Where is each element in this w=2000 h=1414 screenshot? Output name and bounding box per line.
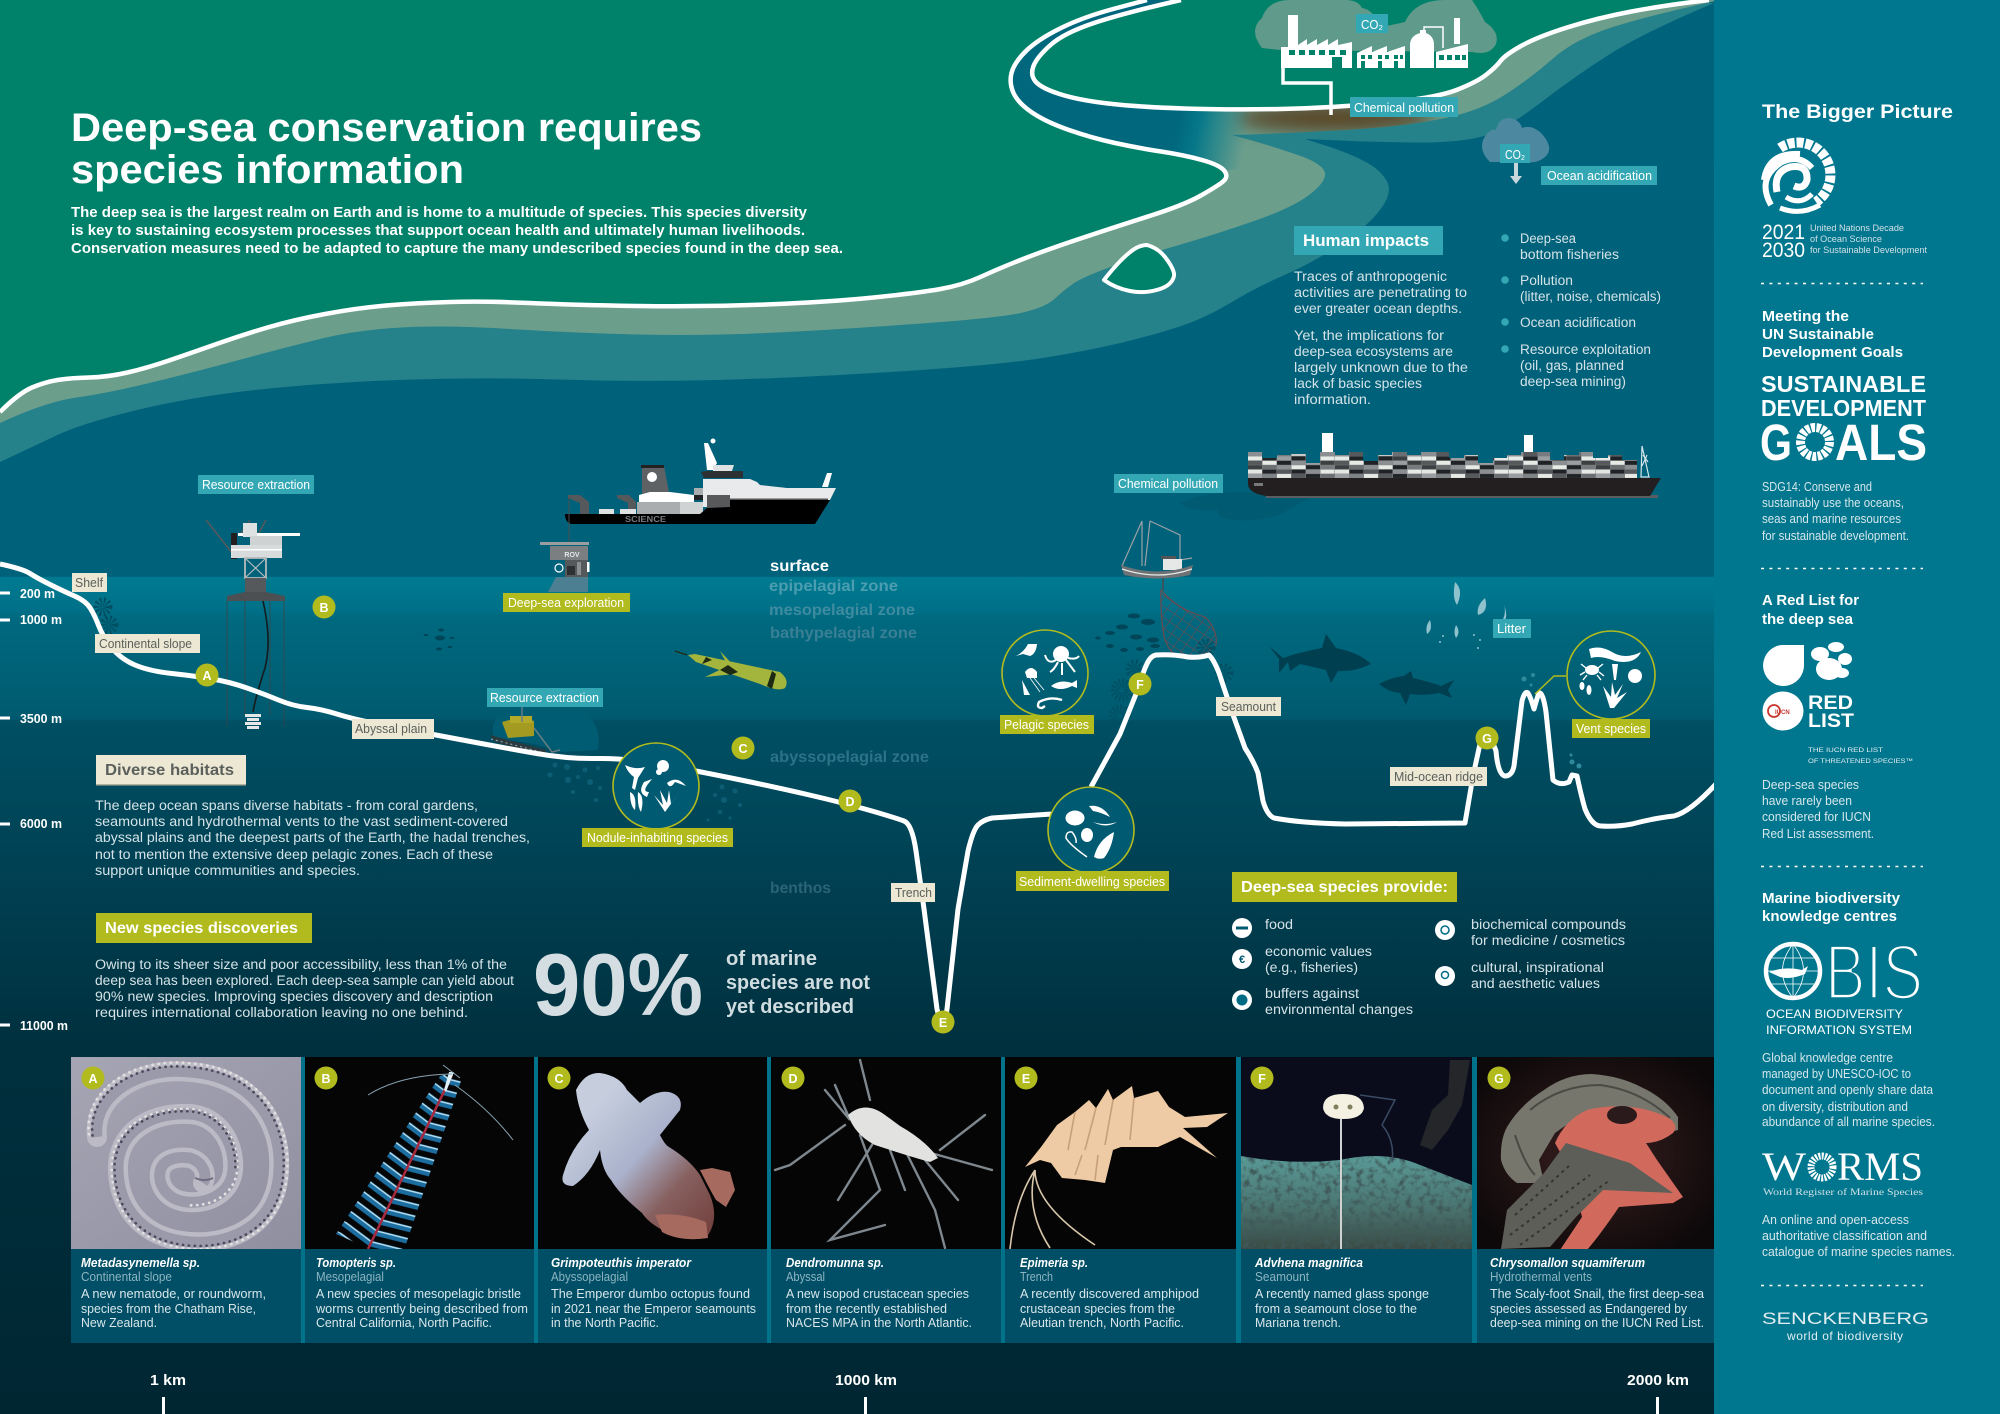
sidebar: Red List section: Red List assessment.	[1762, 827, 1874, 841]
sidebar: SDG section: ALS	[1835, 414, 1927, 471]
species card F: Mariana trench.	[1255, 1316, 1341, 1330]
beige terrain labels: Seamount	[1221, 700, 1277, 714]
sidebar: Red List section: considered for IUCN	[1762, 810, 1871, 824]
panel: human impacts: deep-sea ecosystems are	[1294, 344, 1453, 359]
statistic: 90%: 90%	[533, 935, 703, 1034]
sidebar: knowledge centres section: abundance of all marine species.	[1762, 1115, 1935, 1129]
depth surface zones: benthos	[770, 880, 831, 897]
panel: deep-sea species provide: Deep-sea species provide:	[1241, 879, 1448, 896]
species card A: A	[88, 1072, 98, 1086]
location markers A to G: B	[319, 601, 329, 615]
species card G	[1477, 1057, 1714, 1343]
sidebar: Red List section: the deep sea	[1762, 612, 1854, 628]
logo: Senckenberg: SENCKENBERG	[1762, 1309, 1929, 1328]
sidebar: knowledge centres section: on diversity, distribution and	[1762, 1100, 1908, 1114]
panel: human impacts: (litter, noise, chemicals)	[1520, 289, 1661, 304]
panel: human impacts: information.	[1294, 392, 1371, 407]
panel: human impacts	[1294, 226, 1661, 407]
beige terrain labels	[72, 573, 1487, 902]
sidebar: knowledge centres section: Marine biodiversity	[1762, 891, 1900, 907]
distance scale: 1000 km	[835, 1373, 897, 1389]
intro text: is key to sustaining ecosystem processes that support ocean health and ultimately human livelihoods.	[71, 222, 805, 239]
panel: deep-sea species provide: buffers against	[1265, 986, 1359, 1001]
species card A: Continental slope	[81, 1270, 172, 1284]
sidebar: knowledge centres section: An online and open-access	[1762, 1213, 1909, 1227]
depth scale: 200 m	[20, 586, 55, 601]
location markers A to G: C	[738, 742, 748, 756]
species card C: in the North Pacific.	[551, 1316, 659, 1330]
label: deep-sea exploration: Deep-sea exploration	[508, 596, 624, 610]
panel: human impacts: Deep-sea	[1520, 231, 1576, 246]
species card C: C	[554, 1072, 564, 1086]
species card E: Trench	[1020, 1270, 1053, 1284]
species card D	[771, 1057, 1001, 1343]
sidebar: knowledge centres section: W	[1762, 1144, 1806, 1189]
species card D: Dendromunna sp.	[786, 1256, 884, 1270]
species card D: from the recently established	[786, 1302, 947, 1316]
teal impact labels: Resource extraction	[490, 691, 599, 705]
sidebar: SDG section: Development Goals	[1762, 345, 1903, 361]
vent callout connector	[1535, 676, 1566, 694]
species card D: Abyssal	[786, 1270, 825, 1284]
beige terrain labels: Continental slope	[99, 637, 192, 651]
logo: UN Ocean Decade	[1762, 143, 1927, 262]
panel: new species discoveries: Owing to its sheer size and poor accessibility, less than 1% of the	[95, 957, 507, 972]
sidebar: knowledge centres section: RMS	[1837, 1144, 1923, 1189]
location markers A to G	[196, 596, 1498, 1034]
label: ocean acidification: Ocean acidification	[1547, 169, 1652, 183]
sidebar: knowledge centres section: managed by UNESCO-IOC to	[1762, 1067, 1911, 1081]
beige terrain labels: Abyssal plain	[355, 722, 427, 736]
panel: deep-sea species provide: (e.g., fisheries)	[1265, 960, 1358, 975]
species card G: deep-sea mining on the IUCN Red List.	[1490, 1316, 1704, 1330]
intro text: Conservation measures need to be adapted to capture the many undescribed species found in the deep sea.	[71, 240, 843, 257]
label: pelagic species: Pelagic species	[1004, 718, 1089, 732]
sidebar: knowledge centres section: document and openly share data	[1762, 1083, 1933, 1097]
species card E	[1005, 1057, 1236, 1343]
species circle: vent	[1567, 631, 1655, 719]
panel: human impacts: bottom fisheries	[1520, 247, 1619, 262]
depth scale	[0, 586, 68, 1033]
icon: ROV: ROV	[564, 552, 580, 559]
icon: oil rig	[206, 520, 300, 729]
location markers A to G: E	[939, 1016, 947, 1030]
corals on slopes	[98, 602, 1229, 723]
land: green coast with white coastline	[0, 0, 1709, 412]
title: species information	[71, 148, 464, 192]
sidebar: SDG section: SUSTAINABLE	[1761, 371, 1926, 397]
beige terrain labels: Trench	[895, 886, 932, 900]
location markers A to G: A	[202, 669, 212, 683]
location markers A to G: D	[845, 795, 855, 809]
panel: diverse habitats: The deep ocean spans diverse habitats - from coral gardens,	[95, 798, 478, 813]
sidebar: SDG section: for sustainable development.	[1762, 529, 1909, 543]
species card E: Epimeria sp.	[1020, 1256, 1088, 1270]
icon: factories with CO2 cloud: CO₂	[1361, 17, 1383, 32]
sidebar: Red List section: IUCN	[1775, 710, 1790, 716]
sidebar: Red List section: THE IUCN RED LIST	[1808, 747, 1883, 754]
species card A: Metadasynemella sp.	[81, 1256, 200, 1270]
panel: new species discoveries: deep sea has been explored. Each deep-sea sample can yield about	[95, 973, 514, 988]
logo: UN Ocean Decade: of Ocean Science	[1810, 234, 1882, 244]
nodules and vent plumes	[548, 673, 1582, 822]
panel: diverse habitats	[95, 755, 530, 878]
sidebar: knowledge centres section: knowledge centres	[1762, 909, 1897, 925]
label: chemical pollution (coast)	[1350, 97, 1458, 117]
species card B: Mesopelagial	[316, 1270, 384, 1284]
species card B: A new species of mesopelagic bristle	[316, 1287, 521, 1301]
sidebar: Red List section: RED	[1808, 693, 1853, 714]
panel: human impacts: lack of basic species	[1294, 376, 1422, 391]
species card E: E	[1022, 1072, 1030, 1086]
species card C	[538, 1057, 767, 1343]
depth scale: 1000 m	[20, 612, 62, 627]
sidebar: knowledge centres section: BIS	[1825, 928, 1923, 1016]
label: sediment-dwelling species: Sediment-dwelling species	[1019, 875, 1165, 889]
teal impact labels: Chemical pollution	[1118, 477, 1218, 491]
panel: human impacts: activities are penetrating to	[1294, 285, 1467, 300]
sidebar: SDG section: UN Sustainable	[1762, 327, 1874, 343]
panel: new species discoveries	[95, 913, 514, 1020]
species card F: A recently named glass sponge	[1255, 1287, 1429, 1301]
sidebar: SDG section: sustainably use the oceans,	[1762, 496, 1904, 510]
species circle: sediment-dwelling	[1048, 787, 1134, 873]
species card G: The Scaly-foot Snail, the first deep-sea	[1490, 1287, 1704, 1301]
panel: human impacts: Traces of anthropogenic	[1294, 269, 1447, 284]
sidebar: knowledge centres section	[1762, 891, 1955, 1259]
icon: container ship	[1180, 433, 1661, 520]
label: nodule-inhabiting species	[582, 828, 733, 847]
sidebar: SDG section: G	[1760, 414, 1792, 471]
species card B: B	[321, 1072, 331, 1086]
icon: research ship	[565, 438, 836, 524]
species card D: A new isopod crustacean species	[786, 1287, 969, 1301]
depth surface zones	[769, 558, 929, 897]
species circle: nodule-inhabiting	[613, 743, 699, 829]
panel: deep-sea species provide	[1232, 872, 1626, 1017]
logo: UN Ocean Decade: for Sustainable Development	[1810, 245, 1927, 255]
depth scale: 6000 m	[20, 816, 62, 831]
panel: human impacts: ever greater ocean depths.	[1294, 301, 1462, 316]
species card B: Tomopteris sp.	[316, 1256, 396, 1270]
panel: deep-sea species provide: and aesthetic values	[1471, 976, 1600, 991]
panel: diverse habitats: support unique communities and species.	[95, 863, 360, 878]
intro text	[71, 204, 843, 257]
depth surface zones: abyssopelagial zone	[770, 749, 929, 766]
species card D: NACES MPA in the North Atlantic.	[786, 1316, 972, 1330]
location markers A to G: G	[1482, 732, 1492, 746]
species card A: species from the Chatham Rise,	[81, 1302, 256, 1316]
panel: new species discoveries: 90% new species. Improving species discovery and description	[95, 989, 493, 1004]
panel: deep-sea species provide: biochemical compounds	[1471, 917, 1626, 932]
sidebar panel background	[1714, 0, 2000, 1414]
teal impact labels	[198, 474, 1531, 707]
distance scale	[150, 1373, 1689, 1414]
sidebar: SDG section: Meeting the	[1762, 309, 1849, 325]
icon: fishing boat with net	[1121, 521, 1216, 657]
panel: deep-sea species provide: for medicine / cosmetics	[1471, 933, 1625, 948]
icon: factories with CO2 cloud	[1255, 0, 1497, 115]
icon: ROV	[540, 497, 590, 592]
location markers A to G: F	[1136, 678, 1144, 692]
sidebar: knowledge centres section: Global knowledge centre	[1762, 1051, 1893, 1065]
logo: Senckenberg: world of biodiversity	[1786, 1329, 1903, 1343]
beige terrain labels: Mid-ocean ridge	[1394, 770, 1483, 784]
logo: Senckenberg	[1762, 1309, 1929, 1343]
panel: human impacts: Pollution	[1520, 273, 1573, 288]
teal impact labels: Litter	[1497, 622, 1526, 636]
label: vent species	[1572, 719, 1650, 738]
panel: diverse habitats: abyssal plains and the deepest parts of the Earth, the hadal trenches,	[95, 830, 530, 845]
icon: nodule miner	[490, 694, 599, 756]
panel: deep-sea species provide: economic values	[1265, 944, 1372, 959]
sidebar: Red List section: LIST	[1808, 711, 1854, 732]
sidebar: knowledge centres section: World Register of Marine Species	[1763, 1187, 1923, 1198]
species card G: G	[1494, 1072, 1504, 1086]
species card B: Central California, North Pacific.	[316, 1316, 492, 1330]
fish school and sharks	[424, 614, 1454, 705]
distance scale: 1 km	[150, 1373, 186, 1389]
species card G: Chrysomallon squamiferum	[1490, 1256, 1645, 1270]
icon: CO2 rain cloud	[1482, 118, 1549, 184]
panel: new species discoveries: requires international collaboration leaving no one behind.	[95, 1005, 468, 1020]
panel: new species discoveries: New species discoveries	[105, 920, 298, 937]
species card F: Seamount	[1255, 1270, 1309, 1284]
sidebar: knowledge centres section: catalogue of marine species names.	[1762, 1245, 1955, 1259]
species card C: Abyssopelagial	[551, 1270, 628, 1284]
teal impact labels: Resource extraction	[202, 478, 310, 492]
label: ocean acidification	[1541, 166, 1657, 185]
panel: human impacts: Human impacts	[1303, 232, 1429, 250]
depth surface zones: bathypelagial zone	[770, 625, 917, 642]
species card E: crustacean species from the	[1020, 1302, 1175, 1316]
species card G: species assessed as Endangered by	[1490, 1302, 1688, 1316]
sidebar: knowledge centres section: INFORMATION SYSTEM	[1766, 1023, 1912, 1037]
litter	[1426, 582, 1506, 649]
intro text: The deep sea is the largest realm on Earth and is home to a multitude of species. This species diversity	[71, 204, 808, 221]
logo: UN Ocean Decade: United Nations Decade	[1810, 223, 1904, 233]
statistic: 90%: species are not	[726, 972, 870, 994]
title: Deep-sea conservation requires	[71, 106, 702, 150]
species card E: A recently discovered amphipod	[1020, 1287, 1199, 1301]
statistic: 90%	[533, 935, 870, 1034]
panel: diverse habitats: seamounts and hydrothermal vents to the vast sediment-covered	[95, 814, 508, 829]
sidebar heading: The Bigger Picture	[1762, 101, 1953, 123]
sidebar: SDG section	[1760, 309, 1927, 543]
panel: deep-sea species provide: food	[1265, 917, 1293, 932]
panel: human impacts: Resource exploitation	[1520, 342, 1651, 357]
sidebar: SDG section: SDG14: Conserve and	[1762, 480, 1872, 494]
species circle: pelagic	[1002, 630, 1088, 716]
species card E: Aleutian trench, North Pacific.	[1020, 1316, 1184, 1330]
species card F: F	[1258, 1072, 1266, 1086]
panel: human impacts: (oil, gas, planned	[1520, 358, 1624, 373]
label: nodule-inhabiting species: Nodule-inhabiting species	[587, 831, 728, 845]
panel: deep-sea species provide: €	[1239, 954, 1245, 966]
panel: human impacts: Yet, the implications for	[1294, 328, 1445, 343]
sidebar: Red List section: have rarely been	[1762, 794, 1852, 808]
species card A: A new nematode, or roundworm,	[81, 1287, 266, 1301]
panel: human impacts: largely unknown due to the	[1294, 360, 1468, 375]
panel: diverse habitats: Diverse habitats	[105, 762, 234, 779]
sidebar: Red List section: OF THREATENED SPECIES™	[1808, 758, 1913, 765]
logo: UN Ocean Decade: 2021	[1762, 221, 1805, 244]
statistic: 90%: yet described	[726, 996, 854, 1018]
coastal shelf bands	[0, 0, 1720, 462]
depth surface zones: epipelagial zone	[769, 578, 898, 595]
label: vent species: Vent species	[1576, 722, 1646, 736]
species card F: Advhena magnifica	[1254, 1256, 1363, 1270]
label: deep-sea exploration	[503, 593, 630, 612]
beige terrain labels: Shelf	[75, 576, 104, 590]
depth scale: 11000 m	[20, 1018, 68, 1033]
species card A: New Zealand.	[81, 1316, 157, 1330]
species card D: D	[788, 1072, 798, 1086]
card strip divider background	[71, 1057, 1714, 1343]
label: pelagic species	[1000, 715, 1094, 734]
species card A	[71, 1057, 301, 1343]
icon: underwater glider	[675, 651, 787, 689]
sidebar: Red List section: Deep-sea species	[1762, 778, 1859, 792]
seafloor profile line	[0, 564, 1716, 1022]
panel: human impacts: Ocean acidification	[1520, 315, 1636, 330]
sidebar: knowledge centres section: authoritative classification and	[1762, 1229, 1927, 1243]
depth scale: 3500 m	[20, 711, 62, 726]
sidebar: Red List section: A Red List for	[1762, 593, 1859, 609]
label: sediment-dwelling species	[1016, 871, 1169, 891]
species card C: The Emperor dumbo octopus found	[551, 1287, 750, 1301]
species card C: in 2021 near the Emperor seamounts	[551, 1302, 756, 1316]
sidebar: Red List section	[1762, 593, 1913, 841]
sidebar: SDG section: DEVELOPMENT	[1761, 395, 1926, 421]
sidebar: SDG section: seas and marine resources	[1762, 512, 1901, 526]
title	[71, 106, 702, 192]
logo: UN Ocean Decade: 2030	[1762, 239, 1805, 262]
species card C: Grimpoteuthis imperator	[551, 1256, 692, 1270]
distance scale: 2000 km	[1627, 1373, 1689, 1389]
panel: human impacts: deep-sea mining)	[1520, 374, 1626, 389]
sidebar: knowledge centres section: OCEAN BIODIVERSITY	[1766, 1007, 1903, 1021]
statistic: 90%: of marine	[726, 948, 817, 970]
panel: diverse habitats: not to mention the extensive deep pelagic zones. Each of these	[95, 847, 493, 862]
species card F	[1241, 1057, 1472, 1343]
icon: research ship: SCIENCE	[625, 515, 667, 524]
species card G: Hydrothermal vents	[1490, 1270, 1592, 1284]
depth surface zones: surface	[770, 558, 829, 575]
species card B: worms currently being described from	[315, 1302, 528, 1316]
species card F: from a seamount close to the	[1255, 1302, 1417, 1316]
label: chemical pollution (coast): Chemical pollution	[1354, 101, 1454, 115]
icon: CO2 rain cloud: CO₂	[1505, 147, 1525, 162]
species card B	[305, 1057, 534, 1343]
panel: deep-sea species provide: environmental changes	[1265, 1002, 1413, 1017]
panel: deep-sea species provide: cultural, inspirational	[1471, 960, 1604, 975]
depth surface zones: mesopelagial zone	[769, 602, 915, 619]
